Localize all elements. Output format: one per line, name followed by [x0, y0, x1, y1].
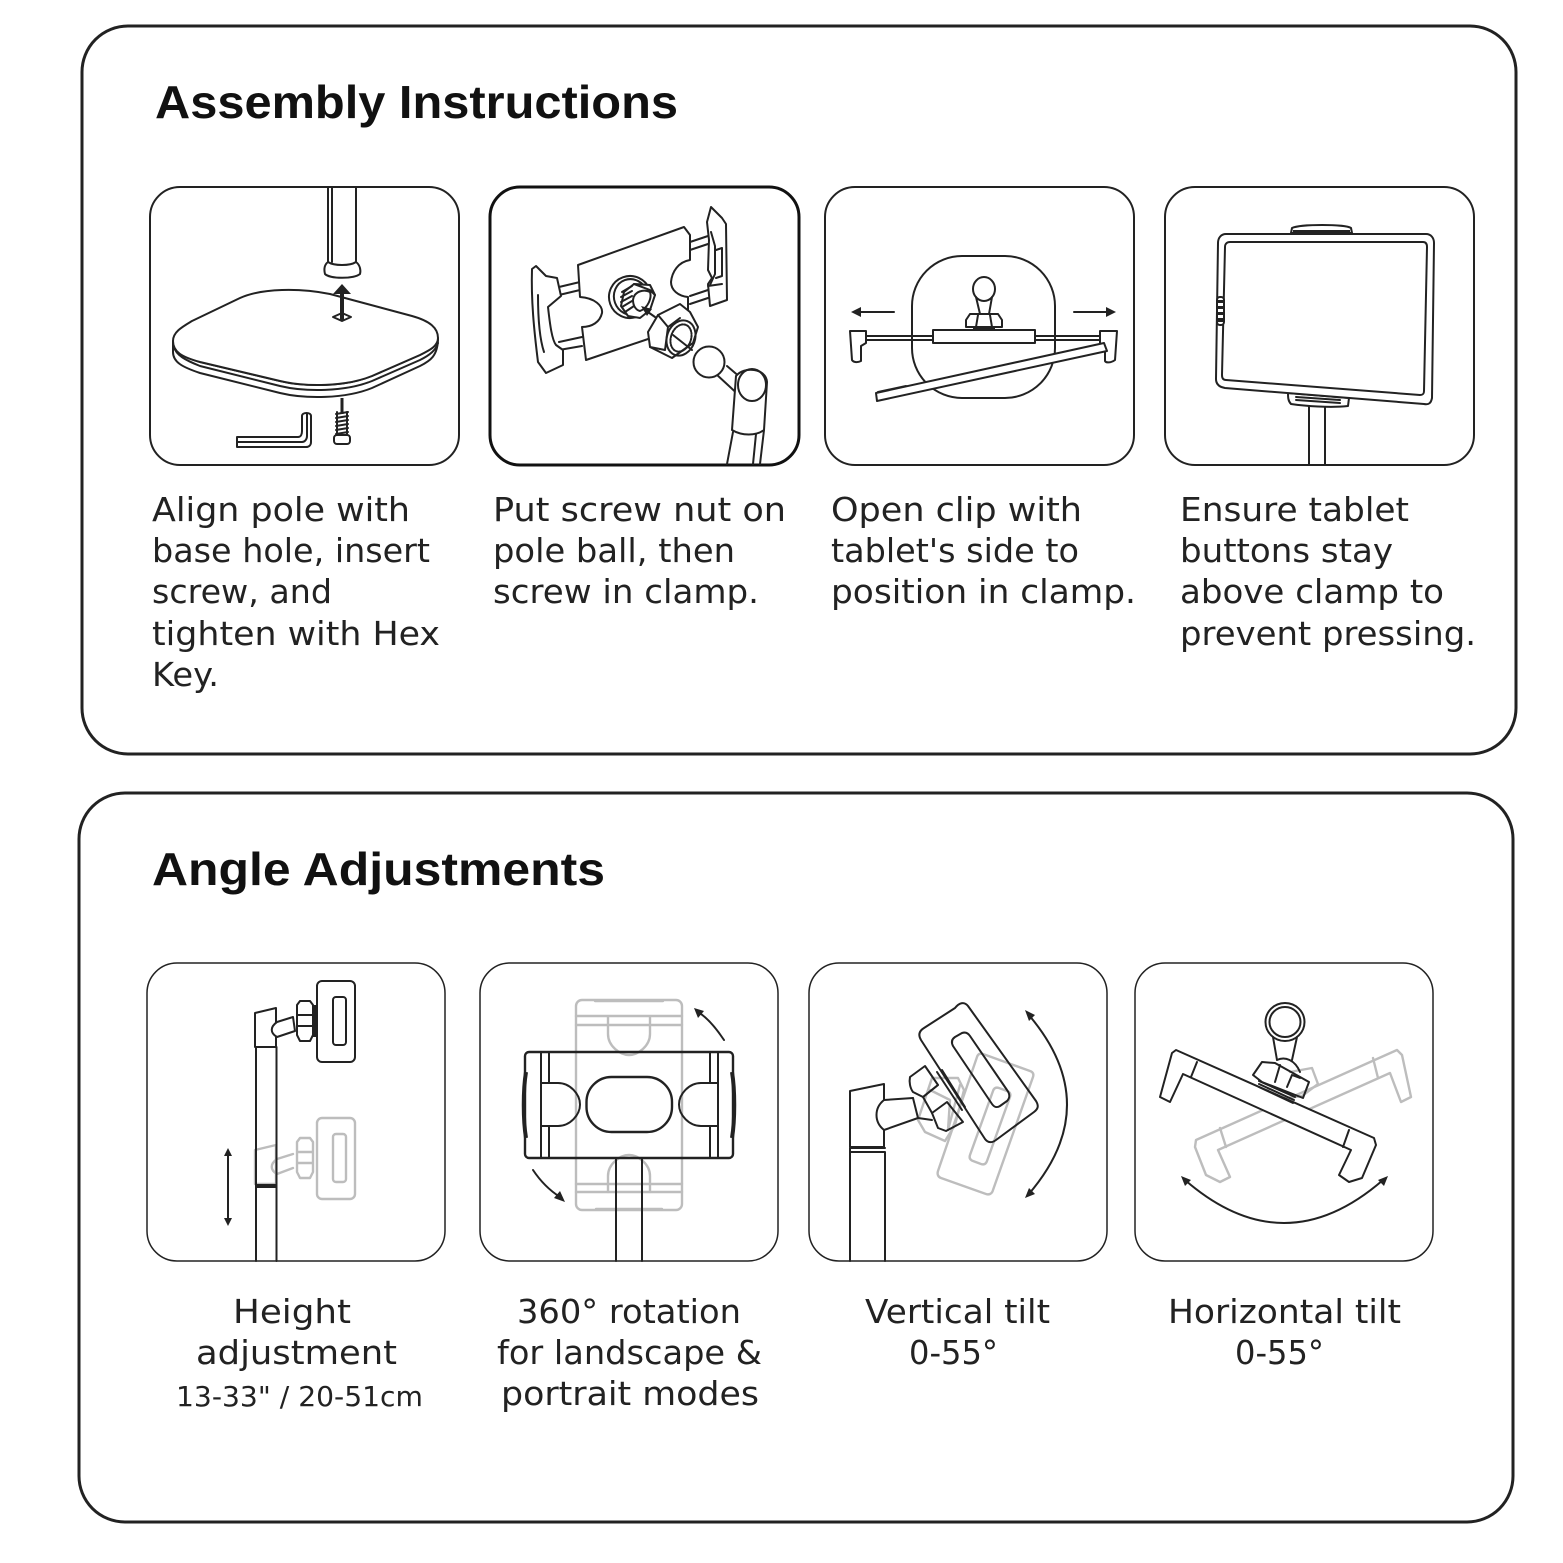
rotation caption: for landscape & [497, 1333, 762, 1372]
step 4 caption: buttons stay [1180, 531, 1393, 570]
step 4 caption: above clamp to [1180, 572, 1444, 611]
card: height adjustment [147, 963, 445, 1261]
step 1 caption: base hole, insert [152, 531, 430, 570]
step 1 caption: Align pole with [152, 490, 410, 529]
step 2 caption [493, 490, 786, 611]
horizontal tilt caption: 0-55° [1235, 1333, 1324, 1372]
card: 360 degree rotation [480, 963, 778, 1261]
step 3 caption: position in clamp. [831, 572, 1136, 611]
step 4 caption [1180, 490, 1476, 653]
rotation caption: portrait modes [501, 1374, 759, 1413]
rotation caption [497, 1292, 762, 1413]
height adjustment caption: Height [233, 1292, 351, 1331]
step 2 caption: pole ball, then [493, 531, 735, 570]
step 4 caption: Ensure tablet [1180, 490, 1409, 529]
step 4 caption: prevent pressing. [1180, 614, 1476, 653]
card: horizontal tilt [1135, 963, 1433, 1261]
heading: assembly instructions: Assembly Instructions [155, 76, 678, 128]
height adjustment caption [176, 1292, 423, 1413]
step 3 caption [831, 490, 1136, 611]
step 2 caption: screw in clamp. [493, 572, 759, 611]
horizontal tilt caption: Horizontal tilt [1168, 1292, 1401, 1331]
vertical tilt caption: 0-55° [909, 1333, 998, 1372]
step 1 card: base and pole [150, 187, 459, 465]
heading: angle adjustments: Angle Adjustments [152, 843, 605, 895]
panel: assembly instructions [82, 26, 1516, 754]
card: vertical tilt [809, 963, 1107, 1261]
rotation caption: 360° rotation [517, 1292, 741, 1331]
step 1 caption: tighten with Hex [152, 614, 440, 653]
step 3 caption: Open clip with [831, 490, 1082, 529]
step 1 caption [152, 490, 440, 694]
step 3 card: open clip with tablet side [825, 187, 1134, 465]
step 4 card: tablet in clamp [1165, 187, 1474, 465]
step 2 card: clamp, nut and pole ball [490, 187, 799, 465]
step 2 caption: Put screw nut on [493, 490, 786, 529]
vertical tilt caption: Vertical tilt [865, 1292, 1050, 1331]
step 3 caption: tablet's side to [831, 531, 1079, 570]
height adjustment caption: adjustment [196, 1333, 397, 1372]
step 1 caption: screw, and [152, 572, 332, 611]
panel: angle adjustments [79, 793, 1513, 1522]
step 1 caption: Key. [152, 655, 219, 694]
height adjustment caption: 13-33" / 20-51cm [176, 1380, 423, 1413]
horizontal tilt caption [1168, 1292, 1401, 1372]
vertical tilt caption [865, 1292, 1050, 1372]
